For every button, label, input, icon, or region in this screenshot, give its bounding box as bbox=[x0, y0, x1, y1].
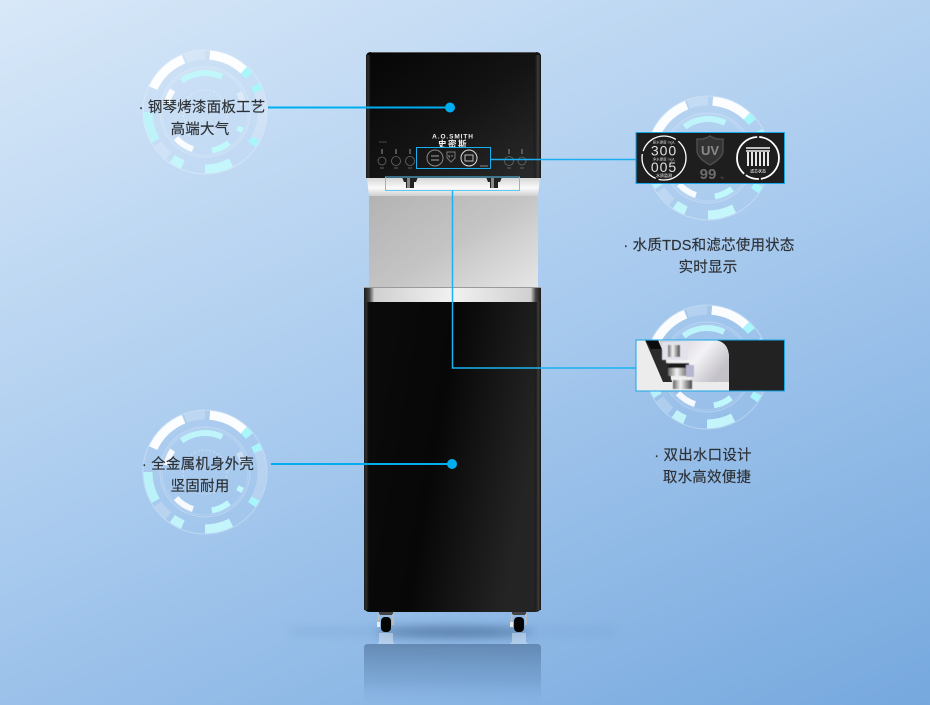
text: piano lacquer: 高端大气 bbox=[171, 121, 229, 138]
badge: UV 99 bbox=[697, 136, 724, 183]
floor reflection and shadow bbox=[290, 627, 616, 705]
callout line: metal shell bbox=[271, 459, 457, 469]
panel: display close-up bbox=[636, 132, 784, 184]
dual water outlets bbox=[402, 177, 502, 188]
text: display bbox=[623, 237, 795, 276]
steel band bbox=[364, 287, 541, 302]
top black cabinet bbox=[366, 52, 541, 178]
gauge: water quality: 300 bbox=[651, 142, 677, 158]
gauge: filter status: 滤芯状态 bbox=[750, 168, 766, 174]
text: metal shell bbox=[142, 455, 254, 495]
icon: tech ring, dual outlets bbox=[626, 286, 788, 448]
gauge: water quality: 原水硬度 mg/L bbox=[653, 140, 675, 144]
callout line: outlets bbox=[386, 177, 636, 368]
control buttons bbox=[378, 142, 526, 168]
badge: UV 99: 99 bbox=[700, 166, 716, 183]
text: outlets: 取水高效便捷 bbox=[663, 469, 751, 486]
text: display: 实时显示 bbox=[679, 259, 737, 276]
panel: outlet close-up bbox=[636, 340, 784, 391]
callout line: display bbox=[416, 148, 636, 168]
text: metal shell: · 全金属机身外壳 bbox=[142, 455, 254, 473]
water dispenser product bbox=[364, 52, 541, 632]
gauge: water quality: 水质监测 bbox=[656, 172, 672, 178]
stainless middle section bbox=[367, 178, 540, 288]
gauge: water quality bbox=[642, 136, 686, 180]
text: piano lacquer: · 钢琴烤漆面板工艺 bbox=[139, 98, 265, 116]
brand logo: 史密斯 bbox=[438, 139, 468, 149]
brand logo bbox=[432, 134, 474, 149]
text: outlets: · 双出水口设计 bbox=[654, 447, 752, 464]
front display bbox=[427, 150, 488, 166]
text: display: · 水质TDS和滤芯使用状态 bbox=[623, 237, 795, 254]
icon: tech ring, piano lacquer bbox=[124, 31, 286, 193]
text: outlets bbox=[654, 447, 752, 486]
brand logo: A.O.SMITH bbox=[432, 134, 474, 140]
icon: tech ring, display bbox=[627, 77, 789, 239]
lower black cabinet bbox=[364, 302, 541, 612]
badge: UV 99: UV bbox=[701, 143, 719, 158]
badge: UV 99: % bbox=[720, 175, 724, 180]
gauge: filter status bbox=[737, 137, 779, 179]
callout line: piano lacquer bbox=[268, 102, 455, 112]
text: piano lacquer bbox=[139, 98, 265, 138]
icon: tech ring, metal shell bbox=[124, 391, 286, 553]
gauge: water quality: 005 bbox=[651, 159, 677, 175]
gauge: water quality: 净水硬度 mg/L bbox=[653, 156, 675, 162]
casters bbox=[377, 612, 526, 632]
text: metal shell: 坚固耐用 bbox=[171, 478, 229, 495]
